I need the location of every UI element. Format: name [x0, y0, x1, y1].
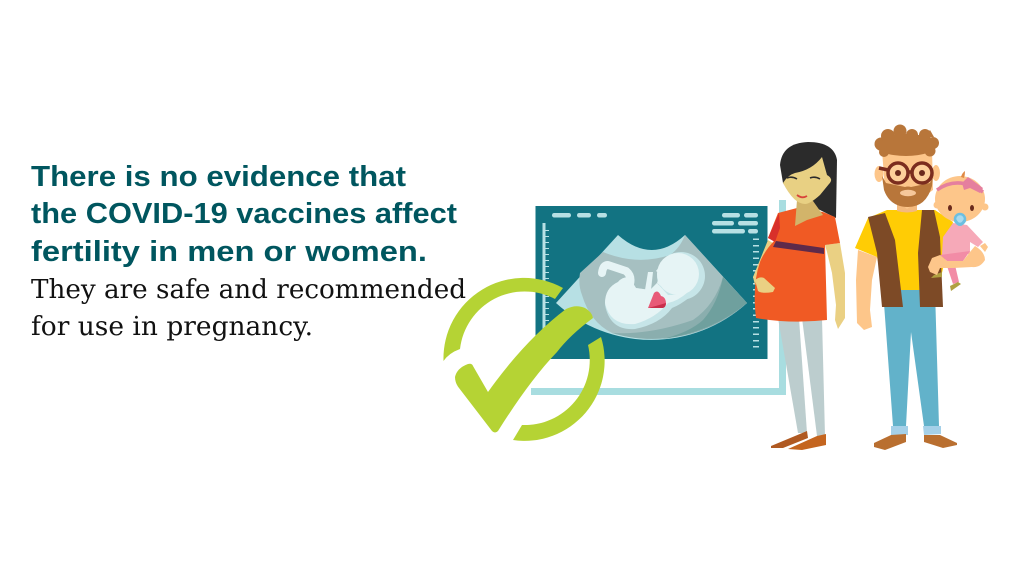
woman legs	[778, 318, 807, 433]
man face	[882, 150, 933, 209]
ultrasound monitor	[531, 200, 786, 395]
fetus body	[605, 277, 688, 324]
upper ring arc	[443, 278, 563, 361]
fetus arm	[645, 272, 653, 290]
woman hair	[780, 142, 837, 218]
fetus heart	[648, 292, 666, 308]
ultrasound scan fan	[556, 235, 747, 340]
right ruler scale	[753, 238, 759, 348]
woman facial features	[787, 177, 820, 179]
woman sleeve shade	[768, 213, 780, 242]
father with baby	[855, 124, 988, 450]
baby pacifier	[955, 214, 965, 224]
woman left arm	[753, 240, 776, 285]
man left arm	[856, 250, 877, 330]
body text: safe in pregnancy: They are safe and recommended	[31, 275, 466, 305]
woman belt	[773, 241, 824, 254]
man vest left panel	[868, 213, 903, 307]
baby feet	[931, 272, 961, 291]
man shoes	[874, 434, 906, 450]
man glasses	[879, 163, 932, 183]
heading: no evidence statement: There is no evidence that	[31, 161, 406, 193]
monitor back frame	[531, 200, 786, 395]
man vest right panel	[918, 210, 943, 307]
baby body	[942, 223, 983, 255]
man neck	[897, 203, 917, 212]
woman shoes	[771, 431, 808, 448]
screen readout pills	[552, 213, 758, 234]
baby eyes	[948, 205, 952, 211]
woman right arm	[825, 243, 845, 329]
baby bow	[962, 177, 983, 193]
man jeans	[883, 290, 939, 426]
pregnant woman	[753, 142, 845, 450]
man curly hair	[874, 124, 939, 157]
man mouth	[900, 190, 916, 196]
man ears	[874, 166, 884, 182]
check tick	[455, 306, 593, 432]
woman dress	[755, 208, 840, 322]
monitor screen	[536, 206, 768, 359]
man forearm holding baby	[928, 246, 985, 275]
heading: no evidence statement: the COVID-19 vaccines affect	[31, 198, 457, 230]
fetus nose	[656, 266, 672, 290]
man beard	[882, 176, 933, 207]
lower ring arc	[513, 337, 605, 441]
baby shorts	[940, 251, 970, 261]
woman neck	[795, 200, 823, 226]
baby headband	[937, 183, 983, 192]
fetus limb	[602, 265, 630, 284]
body text: safe in pregnancy	[31, 275, 466, 342]
fetus halo	[657, 252, 705, 300]
woman hand on belly	[755, 277, 775, 293]
baby leg	[947, 265, 959, 284]
man cuffs	[891, 426, 941, 435]
woman face	[783, 157, 831, 204]
fetus silhouette	[602, 252, 705, 329]
man shirt	[855, 210, 953, 290]
left ruler scale	[542, 223, 549, 333]
heading: no evidence statement: fertility in men or women.	[31, 236, 427, 268]
man eyes	[895, 170, 901, 176]
body text: safe in pregnancy: for use in pregnancy.	[31, 312, 313, 342]
fetus head	[657, 253, 699, 295]
baby hand	[980, 243, 988, 252]
heading: no evidence statement	[31, 161, 457, 268]
baby head	[934, 171, 988, 222]
check mark badge	[443, 278, 605, 441]
